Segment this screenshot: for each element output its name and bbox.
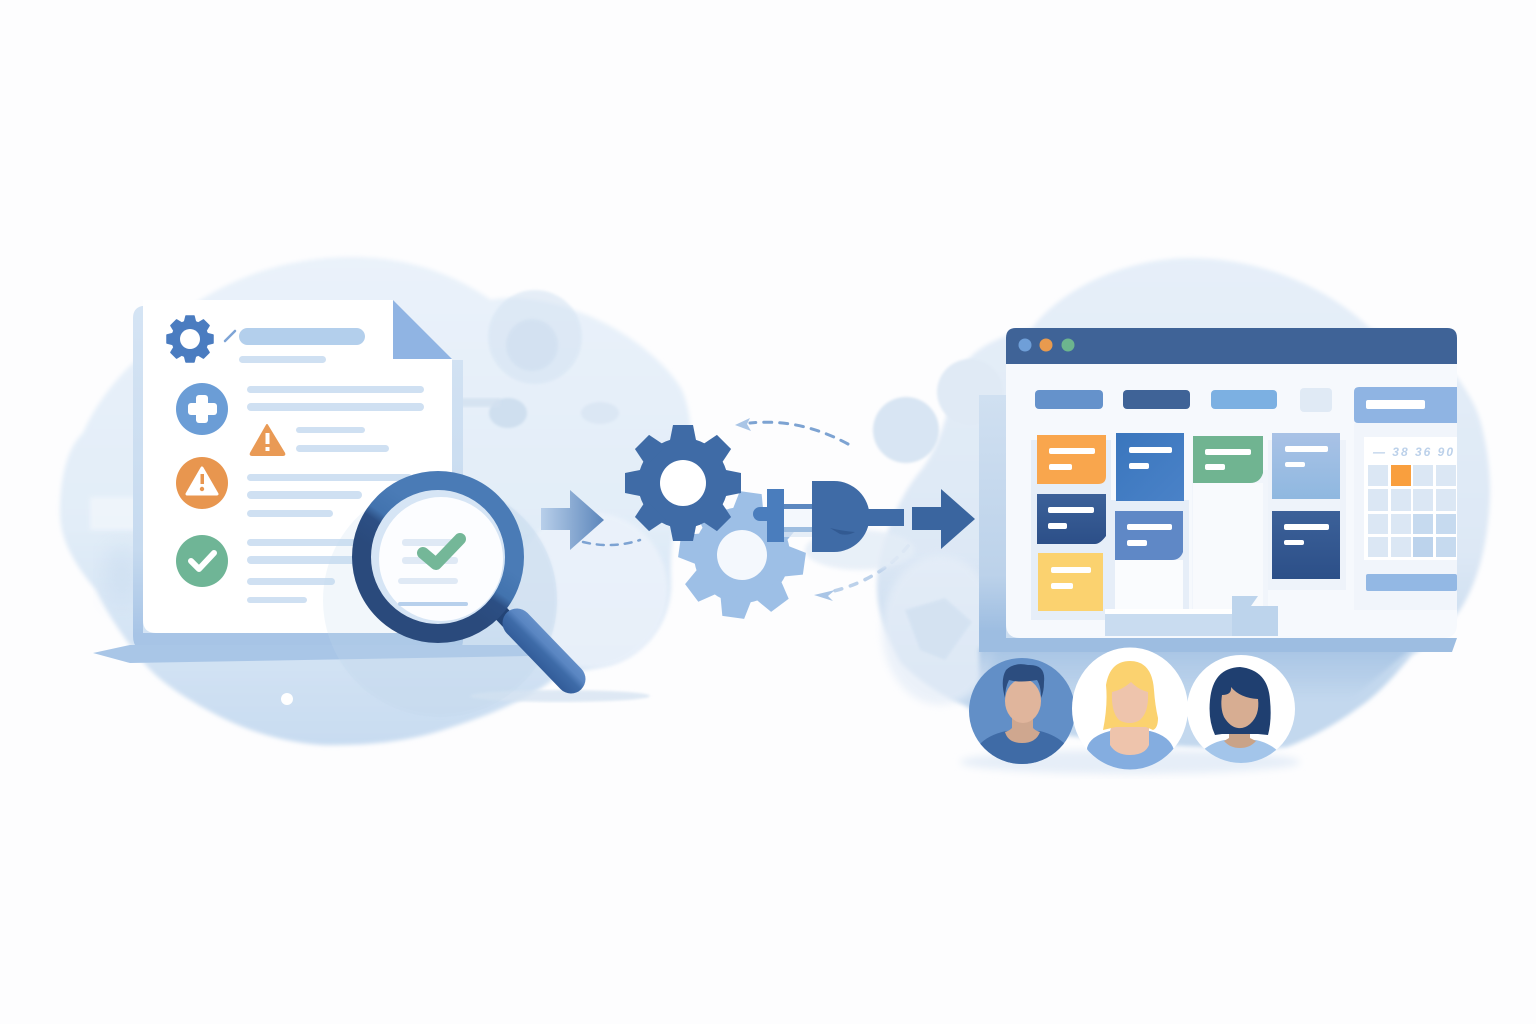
ring: [362, 480, 514, 634]
magnifying glass: [362, 480, 571, 679]
dashed flow: lower left: [583, 540, 640, 545]
card: yellow: [1038, 553, 1103, 611]
pale lens halo: [323, 483, 557, 717]
tabs: [1035, 388, 1332, 412]
right watercolor blob: [873, 258, 1490, 774]
icon: warning: [176, 457, 228, 509]
icon: small warning triangle: [251, 425, 284, 455]
document shadow: [133, 306, 463, 652]
card: navy: [1037, 494, 1106, 544]
card: blue: [1116, 433, 1184, 501]
under-window shading: [979, 648, 1412, 700]
icon: plug connector: [753, 481, 904, 552]
text lines block 2: [247, 474, 412, 517]
icon: dark gear: [625, 425, 741, 541]
column backgrounds: [1031, 440, 1346, 620]
avatar: dark-haired woman: [1187, 655, 1295, 770]
bottom tray: [1105, 596, 1278, 636]
window shadow: [979, 395, 1457, 652]
calendar: — 38 36 90: [1372, 445, 1453, 459]
icon: check: [176, 535, 228, 587]
window body: [1006, 360, 1457, 638]
laptop-like base: [93, 645, 530, 663]
title bar: [1006, 328, 1457, 364]
dashed flow: lower right with arrowhead: [814, 546, 908, 601]
arrow: left to gears: [541, 490, 604, 550]
card: orange: [1037, 435, 1106, 484]
sidebar panel: [1354, 387, 1457, 610]
arrow: gears to board: [912, 489, 975, 549]
icon: light gear: [671, 484, 813, 626]
text lines block 1: [247, 386, 424, 452]
avatar: man: [969, 658, 1075, 770]
heading lines: [239, 328, 365, 363]
panel: board window: [979, 328, 1457, 700]
illustration: [59, 256, 1492, 776]
card: green: [1193, 436, 1263, 483]
lens: [370, 489, 506, 625]
folded corner: [393, 300, 452, 359]
icon: plus: [176, 383, 228, 435]
card: pale blue: [1272, 433, 1340, 499]
handle: [497, 609, 571, 679]
icon: lens check: [423, 539, 460, 564]
icon: settings gear: [167, 316, 213, 362]
panel: document: [93, 300, 530, 663]
card: dark blue: [1272, 511, 1340, 579]
left watercolor blob: [60, 257, 692, 745]
text lines block 3: [247, 539, 392, 603]
dashed flow: top with arrowhead: [735, 418, 848, 444]
calendar: [1364, 437, 1457, 560]
card: mid blue: [1115, 511, 1183, 560]
plug soft shadow: [805, 530, 915, 570]
avatar: blonde woman: [1072, 648, 1188, 775]
window dots: [1018, 338, 1074, 352]
